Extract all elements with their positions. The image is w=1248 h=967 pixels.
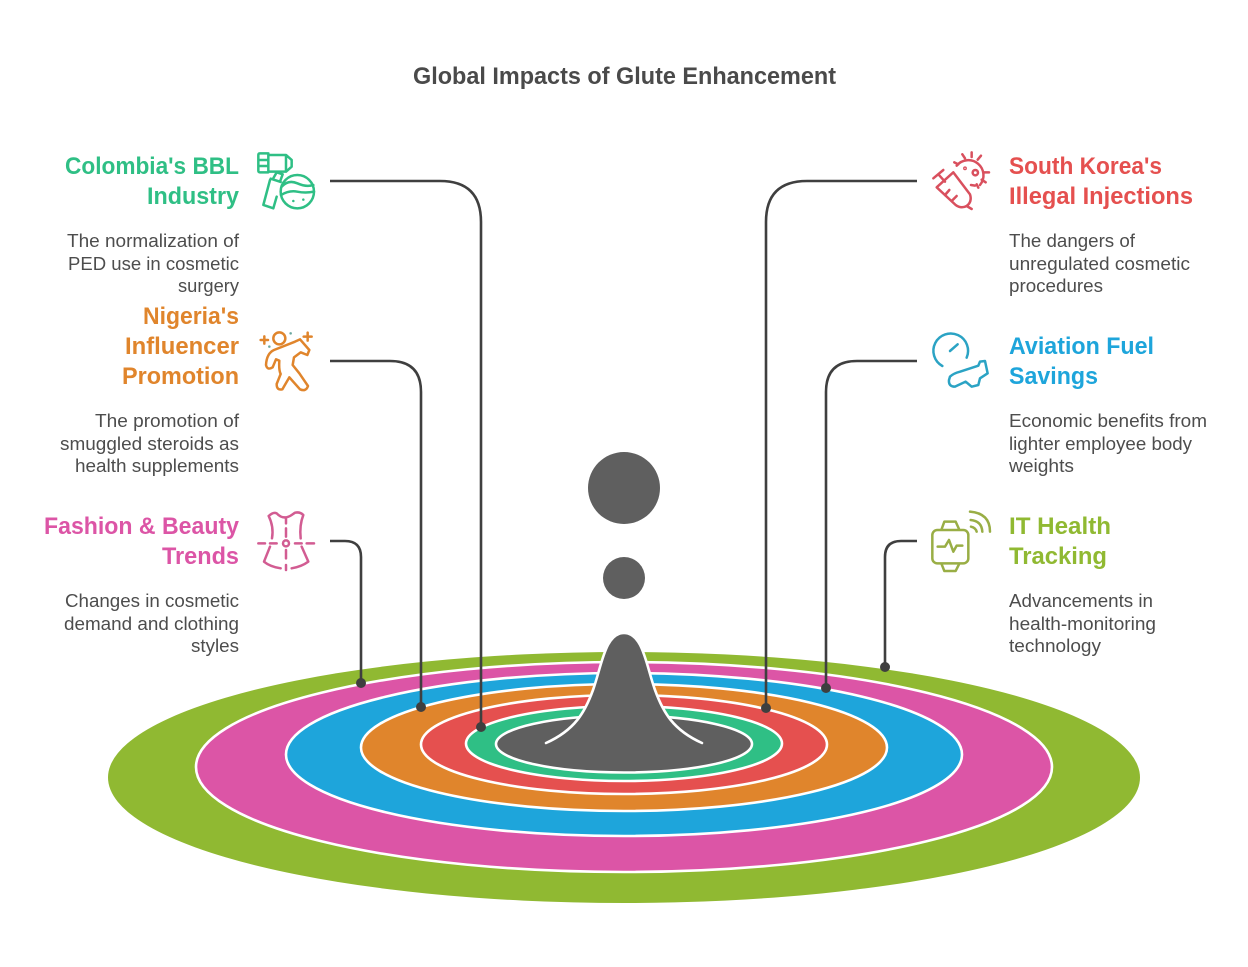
text: Fashion description: demand and clothing [64,614,239,634]
text: Aviation description: weights [1008,456,1074,476]
text: South Korea description: unregulated cosmetic [1009,254,1190,274]
text: Nigeria description: smuggled steroids as [60,434,239,454]
ring: South Korea's Illegal Injections [421,695,827,794]
text: IT Health description: technology [1009,636,1101,656]
heading: Fashion: Fashion & Beauty [44,513,240,540]
text: Fashion description: styles [191,636,239,656]
text: Aviation description: lighter employee body [1009,434,1192,454]
panel: IT Health Tracking [932,512,1156,656]
heading: Colombia [65,153,240,210]
connector: Nigeria [330,361,426,712]
connector: Fashion [330,541,366,688]
heading: Aviation: Aviation Fuel [1009,333,1154,360]
icon: hair dryer and body [258,153,314,208]
text: South Korea description: procedures [1009,276,1103,296]
ring: Aviation Fuel Savings [286,673,962,836]
icon: person with sparkles [261,332,312,390]
text: Colombia description: The normalization of [67,231,240,251]
heading: IT Health: Tracking [1009,543,1107,570]
connector: Colombia [330,181,486,732]
panel: Nigeria's Influencer Promotion [60,303,312,476]
text: Colombia description: PED use in cosmetic [68,254,239,274]
heading: Aviation [1009,333,1154,390]
droplet: small [603,557,645,599]
title: Global Impacts of Glute Enhancement [413,63,836,90]
text: Nigeria description: The promotion of [95,411,240,431]
heading: South Korea: South Korea's [1009,153,1162,180]
connector: IT Health [880,541,917,672]
text: South Korea description: The dangers of [1009,231,1136,251]
panel: Aviation Fuel Savings [933,333,1207,476]
heading: Fashion: Trends [162,543,239,570]
text: Fashion description: Changes in cosmetic [65,591,239,611]
central splash peak [546,633,702,743]
connector: South Korea [761,181,917,713]
ring: Nigeria's Influencer Promotion [361,684,887,811]
text: Fashion description [64,591,239,656]
panel: Colombia's BBL Industry [65,153,314,296]
heading: South Korea [1009,153,1193,210]
text: Colombia description: surgery [178,276,239,296]
text: Aviation description [1008,411,1207,476]
connector: Aviation [821,361,917,693]
text: Colombia description [67,231,240,296]
ring: Colombia's BBL Industry [466,706,782,781]
icon: syringe and virus [933,152,989,209]
ring: centre [496,716,752,772]
heading: South Korea: Illegal Injections [1009,183,1193,210]
heading: Fashion [44,513,240,570]
text: Nigeria description: health supplements [75,456,239,476]
heading: Nigeria: Influencer [125,333,239,360]
text: IT Health description: health-monitoring [1009,614,1156,634]
heading: Colombia: Industry [147,183,240,210]
heading: Nigeria: Nigeria's [143,303,239,330]
panel: Fashion & Beauty Trends [44,512,314,656]
icon: gauge and airplane [933,334,988,387]
text: Aviation description: Economic benefits from [1009,411,1207,431]
heading: Nigeria [122,303,239,390]
heading: IT Health [1009,513,1111,570]
heading: Colombia: Colombia's BBL [65,153,239,180]
concentric ripple chart [108,452,1140,903]
icon: smartwatch with signal [932,512,990,571]
heading: Nigeria: Promotion [122,363,239,390]
icon: dress with measure lines [258,512,314,570]
heading: IT Health: IT Health [1009,513,1111,540]
text: IT Health description: Advancements in [1009,591,1153,611]
panel: South Korea's Illegal Injections [933,152,1193,296]
droplet: large [588,452,660,524]
text: Nigeria description [60,411,240,476]
heading: Aviation: Savings [1009,363,1098,390]
text: IT Health description [1009,591,1156,656]
ring: IT Health Tracking [108,652,1140,903]
text: South Korea description [1009,231,1190,296]
ring: Fashion and Beauty Trends [196,662,1052,872]
